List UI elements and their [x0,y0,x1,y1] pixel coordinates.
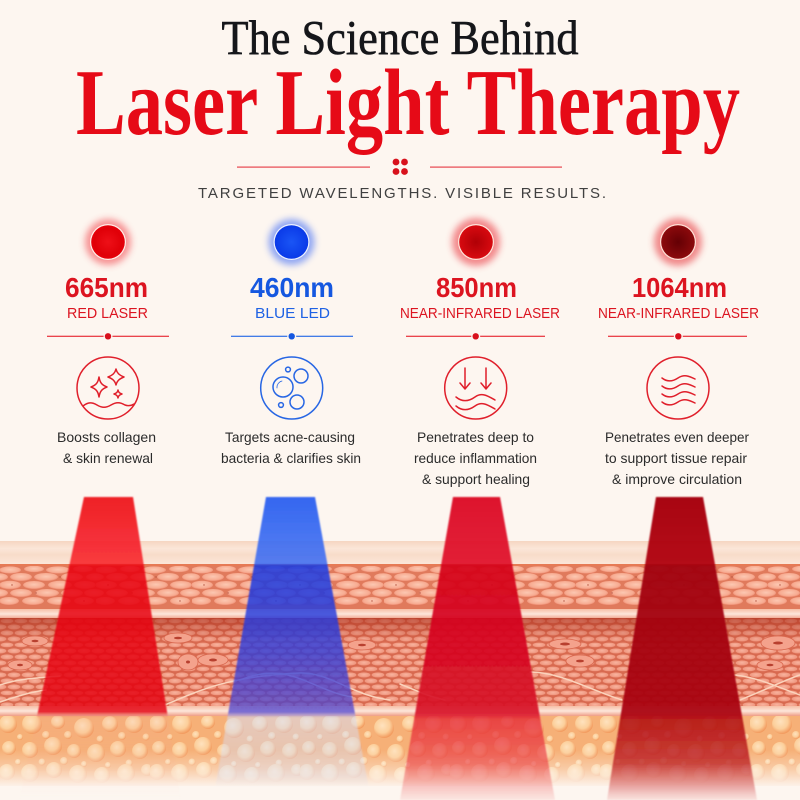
description: to support tissue repair [605,450,747,466]
wavelength 1064nm: 1064nm [632,272,727,303]
subtitle: TARGETED WAVELENGTHS. VISIBLE RESULTS. [198,185,606,202]
divider [608,332,747,341]
icon: arrows into waves [445,357,507,419]
red light beam [19,497,181,800]
type: red laser: RED LASER [67,306,148,322]
icon: four waves [647,357,709,419]
description: & skin renewal [63,450,153,466]
title: The Science Behind: The Science Behind [222,10,578,65]
description: Boosts collagen [57,429,156,445]
description: reduce inflammation [414,450,537,466]
cell layer [0,564,800,609]
description [605,429,749,487]
upper membrane band [0,609,800,619]
description [414,429,537,487]
description: Targets acne-causing [225,429,355,445]
description: Penetrates even deeper [605,429,749,445]
dermis layer with fibres [0,618,800,707]
near-infrared 850nm beam [400,497,555,800]
description: bacteria & clarifies skin [221,450,361,466]
icon: deep red light dot [452,218,500,266]
skin cross-section [0,541,800,788]
divider [406,332,545,341]
title divider with four dots [237,159,562,175]
wavelength 665nm: 665nm [65,272,148,303]
description [57,429,156,466]
lower membrane band [0,706,800,716]
fat layer [0,712,800,788]
description: & support healing [422,471,530,487]
wavelength 850nm: 850nm [436,272,517,303]
wavelength 460nm: 460nm [250,272,334,303]
near-infrared 1064nm beam [607,497,757,800]
icon: sparkles over skin [77,357,139,419]
panel: 1064nm near-infrared laser [598,218,759,487]
description: & improve circulation [612,471,742,487]
icon: dark red light dot [654,218,702,266]
type: blue LED: BLUE LED [255,306,330,322]
icon: red light dot [85,219,131,265]
icon: bacteria bubbles [261,357,323,419]
panel: 850nm near-infrared laser [400,218,560,487]
icon: blue light dot [268,219,314,265]
type: near-infrared laser: NEAR-INFRARED LASER [400,306,560,322]
panel: 665nm red laser [47,219,169,466]
description [221,429,361,466]
divider [47,332,169,341]
description: Penetrates deep to [417,429,534,445]
blue light beam [213,497,371,800]
epidermis surface layer [0,541,800,566]
type: near-infrared laser: NEAR-INFRARED LASER [598,306,759,322]
divider [231,332,353,341]
panel: 460nm blue LED [221,219,361,466]
